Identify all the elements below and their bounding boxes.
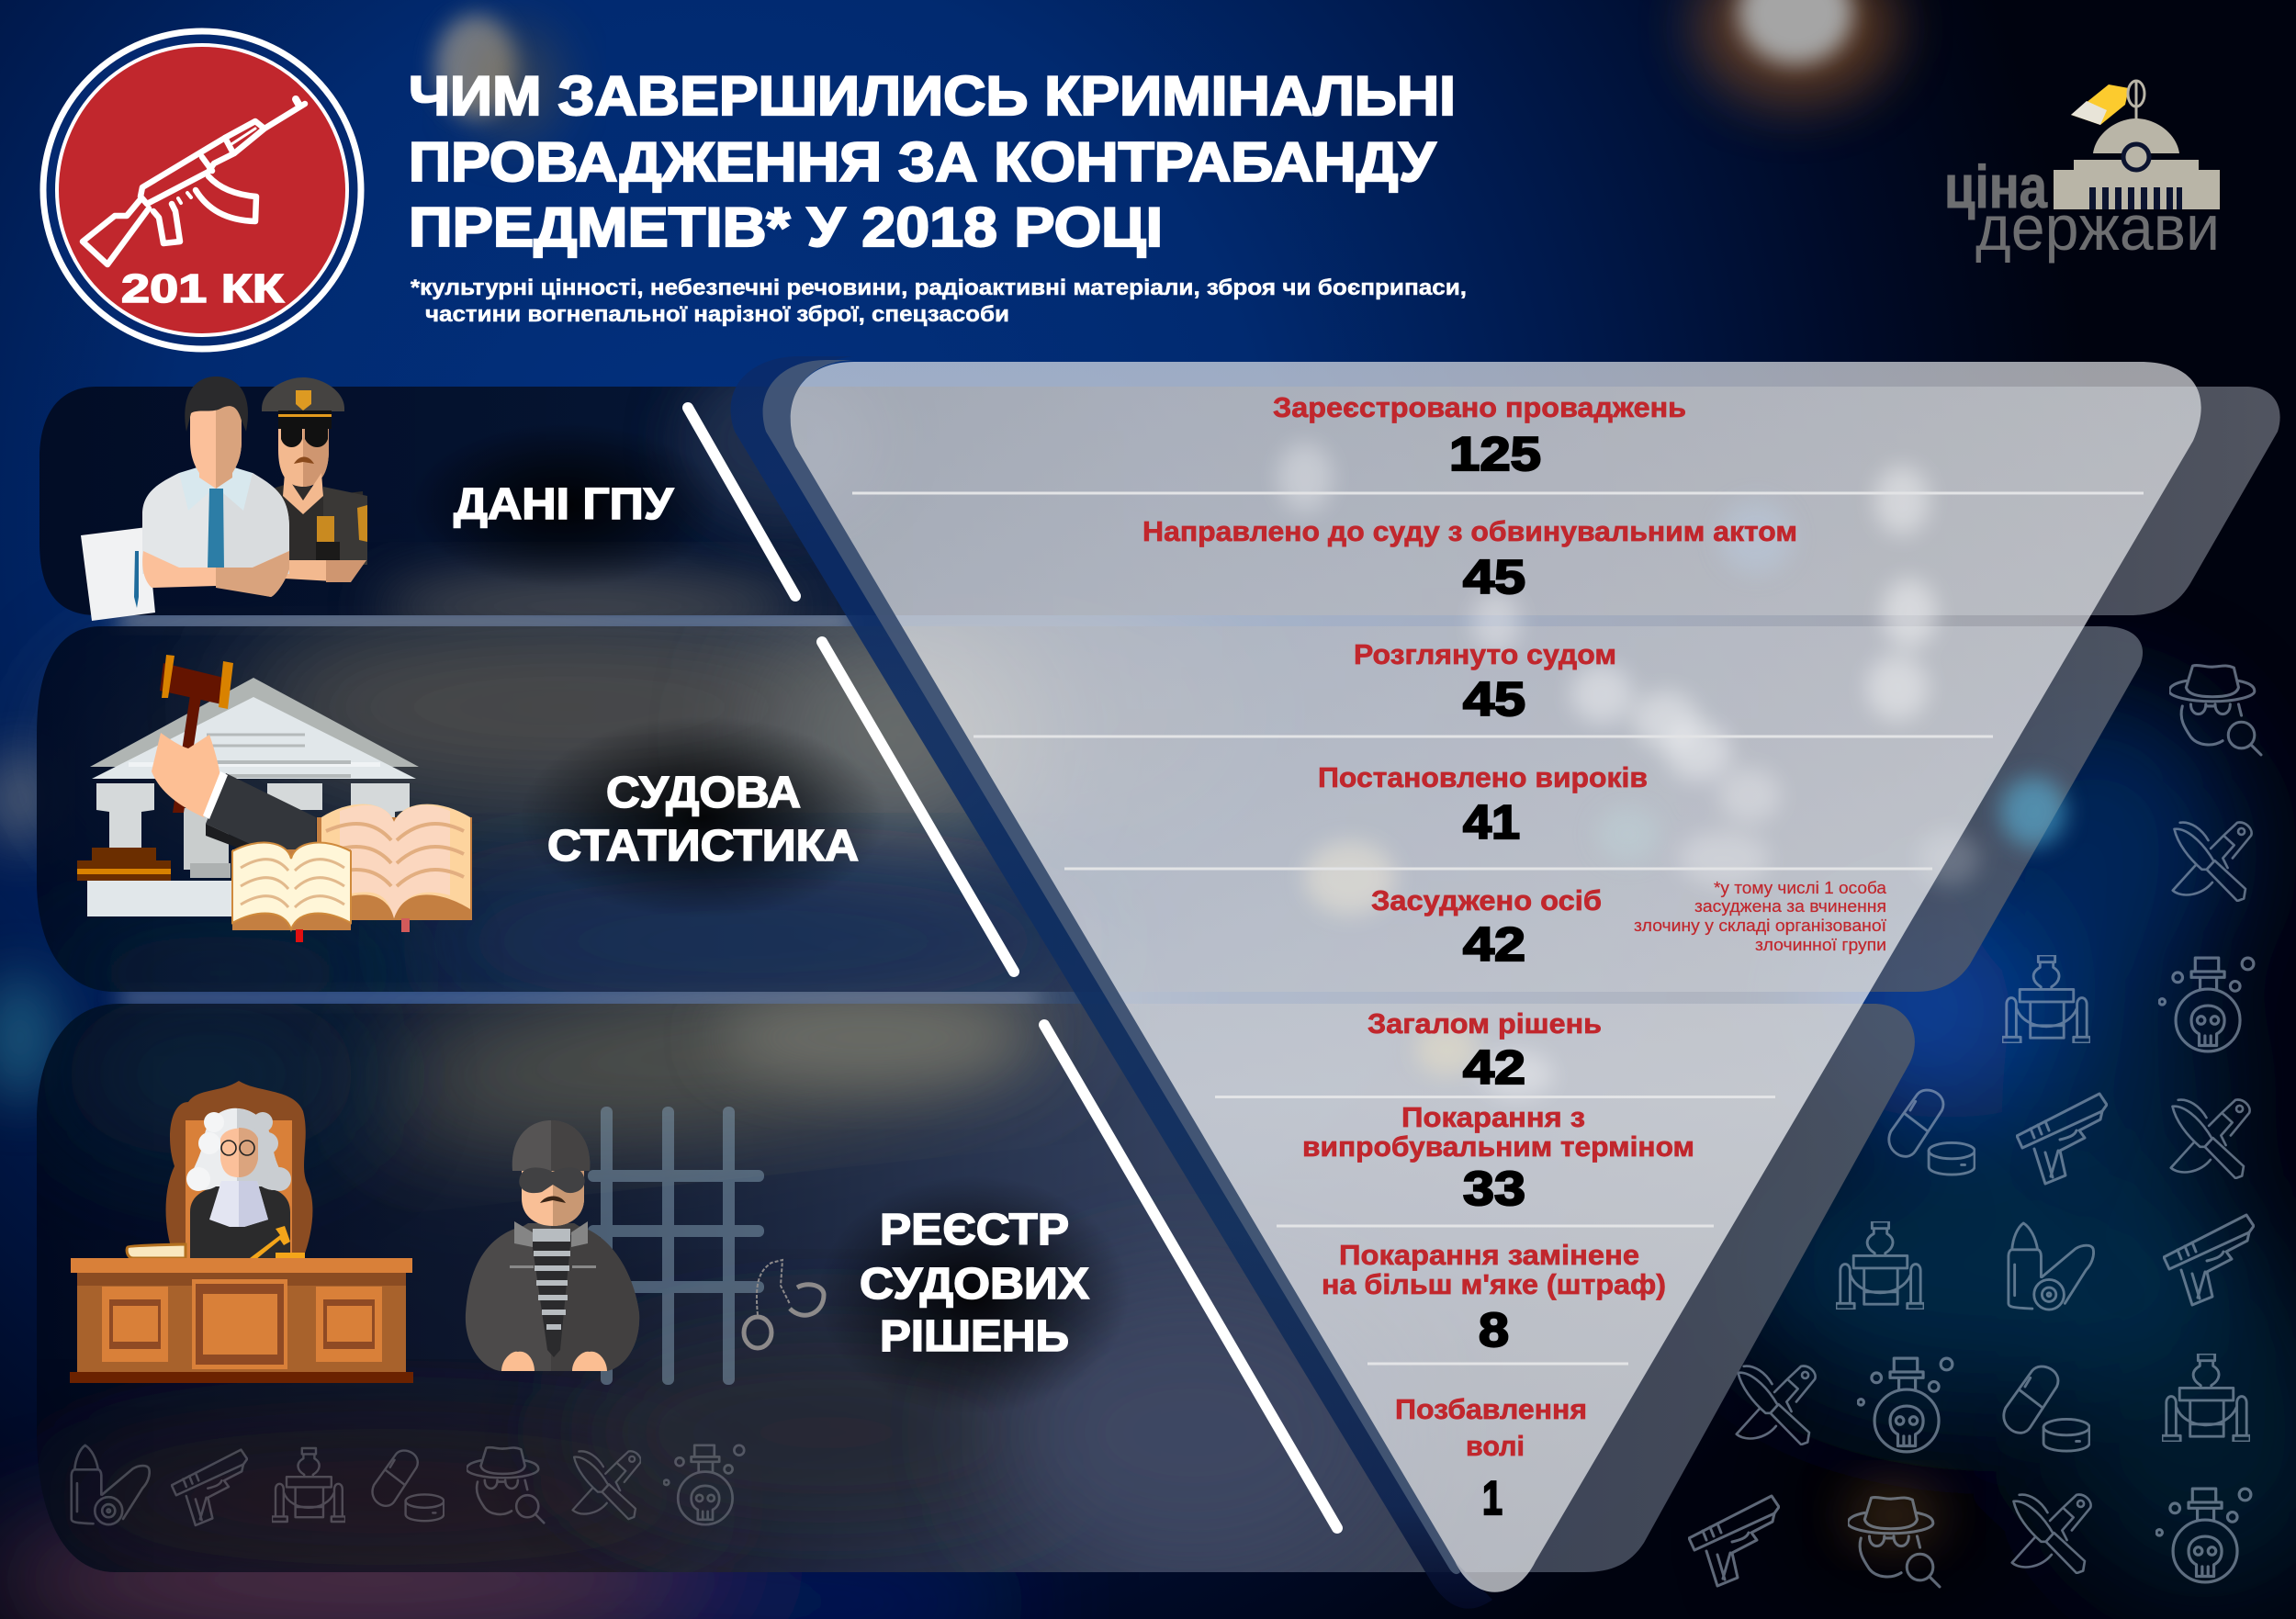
book and gavel [127, 1244, 186, 1258]
funnel stat: total decisions [1367, 1007, 1602, 1095]
footnote: organized group [1634, 879, 1887, 954]
funnel stat: softer penalty [1322, 1239, 1666, 1357]
logo: Ціна держави: ціна [1944, 152, 2048, 220]
funnel stat: probation [1302, 1101, 1694, 1216]
panel label: Судова статистика: СУДОВА [606, 769, 801, 817]
gavel [160, 655, 233, 813]
funnel stat: imprisonment: волі [1466, 1430, 1525, 1462]
sound block [77, 848, 171, 881]
funnel stat: registered: 125 [1449, 428, 1541, 481]
funnel stat: softer penalty: Покарання замінене [1339, 1239, 1639, 1271]
footnote: organized group: *у тому числі 1 особа [1714, 879, 1887, 897]
slanted white dividers [688, 408, 1337, 1528]
funnel stat: probation: випробувальним терміном [1302, 1130, 1694, 1163]
chair [166, 1081, 312, 1258]
footnote: organized group: засуджена за вчинення [1694, 897, 1886, 916]
panel: Реєстр судових рішень [37, 1004, 1915, 1572]
subtitle footnote: частини вогнепальної нарізної зброї, спецзасоби [425, 302, 1009, 327]
funnel: main translucent shape [791, 362, 2201, 1592]
panel 1 photo tones [369, 387, 806, 615]
policeman [262, 377, 367, 582]
title: ПРЕДМЕТІВ* У 2018 РОЦІ [409, 197, 1163, 258]
funnel row separators [852, 493, 2144, 1364]
funnel stat: considered [1354, 638, 1616, 726]
logo: Ціна держави: держави [1975, 192, 2220, 264]
funnel stat: probation: 33 [1463, 1163, 1525, 1216]
funnel stat: imprisonment: 1 [1482, 1472, 1503, 1525]
icon: prosecutor and policeman [81, 377, 367, 621]
wig [186, 1108, 291, 1191]
funnel stat: probation: Покарання з [1401, 1101, 1585, 1133]
bars [588, 1107, 764, 1385]
hand and sleeve [152, 733, 316, 859]
panel label: Реєстр судових рішень: РІШЕНЬ [880, 1312, 1069, 1361]
small book [232, 843, 351, 942]
panel label: Реєстр судових рішень: СУДОВИХ [860, 1260, 1089, 1309]
panel label: Судова статистика [547, 769, 859, 871]
funnel stat: registered [1273, 391, 1686, 481]
funnel stat: convicted [1371, 884, 1602, 972]
handcuffs [744, 1260, 824, 1348]
panel: Судова статистика [37, 626, 2143, 992]
funnel stat: considered: Розглянуто судом [1354, 638, 1616, 670]
panel label: Судова статистика: СТАТИСТИКА [547, 822, 859, 871]
funnel stat: convicted: 42 [1463, 918, 1525, 972]
icon: thief with prison bars [466, 1107, 824, 1385]
funnel stat: softer penalty: на більш м'яке (штраф) [1322, 1268, 1666, 1300]
icon: assault rifle [83, 99, 305, 264]
funnel stat: considered: 45 [1463, 673, 1525, 726]
title [409, 65, 1456, 258]
funnel stat: convicted: Засуджено осіб [1371, 884, 1602, 916]
robe [190, 1185, 290, 1258]
paper and pen [81, 527, 155, 621]
funnel stat: sent to court: 45 [1463, 551, 1525, 604]
panel label: Реєстр судових рішень [860, 1206, 1089, 1361]
subtitle footnote: *культурні цінності, небезпечні речовини, радіоактивні матеріали, зброя чи боєприпаси, [411, 275, 1467, 300]
logo: Ціна держави [1944, 81, 2220, 264]
columns [96, 783, 410, 878]
funnel stat: verdicts [1318, 761, 1648, 849]
desk [77, 1273, 406, 1372]
badge label: 201 КК [121, 266, 284, 311]
big book [317, 804, 472, 932]
icon: courthouse with gavel and books [77, 655, 472, 942]
subtitle footnote [411, 275, 1467, 327]
footnote: organized group: злочинної групи [1755, 936, 1886, 954]
funnel stat: total decisions: 42 [1463, 1041, 1525, 1095]
icon: judge at desk [70, 1081, 413, 1383]
head [522, 1171, 584, 1226]
funnel stat: imprisonment: Позбавлення [1395, 1393, 1587, 1425]
funnel stat: softer penalty: 8 [1479, 1304, 1509, 1357]
funnel stat: verdicts: Постановлено вироків [1318, 761, 1648, 793]
funnel back layers [730, 356, 1492, 1609]
funnel stat: verdicts: 41 [1463, 796, 1520, 849]
panel label: ДАНІ ГПУ: ДАНІ ГПУ [454, 480, 674, 529]
funnel stat: total decisions: Загалом рішень [1367, 1007, 1602, 1040]
decorative contraband icons bottom-left [72, 1445, 744, 1525]
panel: ДАНІ ГПУ [39, 387, 2280, 615]
title: ЧИМ ЗАВЕРШИЛИСЬ КРИМІНАЛЬНІ [409, 65, 1456, 127]
logo badge: article 201 KK [43, 31, 361, 349]
body [466, 1223, 639, 1371]
funnel stat: sent to court [1142, 515, 1797, 604]
panel label: Реєстр судових рішень: РЕЄСТР [880, 1206, 1069, 1254]
prosecutor [142, 377, 289, 597]
funnel stat: imprisonment [1395, 1393, 1587, 1525]
title: ПРОВАДЖЕННЯ ЗА КОНТРАБАНДУ [409, 131, 1436, 193]
panel 2 photo tones [107, 626, 1037, 992]
funnel stat: sent to court: Направлено до суду з обвинувальним актом [1142, 515, 1797, 547]
decorative contraband icons on right [1689, 665, 2261, 1587]
dark glow behind panel labels [409, 422, 1130, 1414]
bokeh lights in funnel [1277, 443, 2066, 1098]
funnel stat: registered: Зареєстровано проваджень [1273, 391, 1686, 423]
footnote: organized group: злочину у складі організованої [1634, 916, 1886, 935]
panel 3 photo tones [37, 952, 1396, 1580]
